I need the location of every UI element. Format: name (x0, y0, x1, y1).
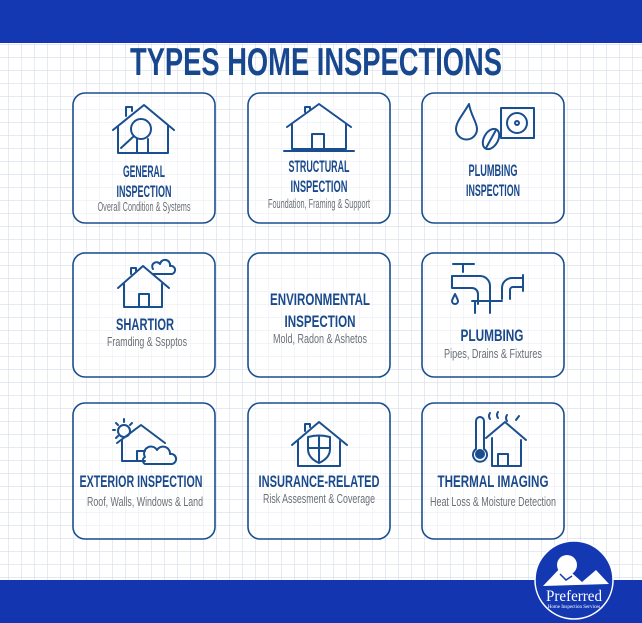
panel: plumbing inspection: INSPECTION (466, 181, 520, 200)
panel: plumbing (422, 253, 564, 377)
panel: general inspection: Overall Condition & Systems (98, 200, 190, 214)
bottom bar (0, 580, 642, 623)
icon: faucet and pipes (452, 264, 523, 313)
icon: house with cloud (118, 260, 175, 307)
panel: exterior inspection: EXTERIOR INSPECTION (80, 472, 202, 491)
icon: drop leaf fan (456, 104, 534, 152)
panel: thermal imaging: Heat Loss & Moisture Detection (430, 495, 556, 509)
panel: general inspection: GENERAL (123, 162, 165, 181)
logo: Home Inspection Services (548, 605, 600, 610)
panel: thermal imaging (422, 403, 564, 539)
panel: exterior inspection: Roof, Walls, Windows & Land (87, 495, 203, 509)
panel: environmental inspection: Mold, Radon & Ashetos (273, 332, 367, 346)
panel: thermal imaging: THERMAL IMAGING (438, 472, 548, 491)
logo (535, 541, 613, 619)
logo: Preferred (546, 588, 602, 605)
panel: general inspection (73, 93, 215, 223)
panel: structural inspection (248, 93, 390, 223)
panel: shartior: Framding & Sspptos (107, 335, 187, 349)
icon: thermometer and house (473, 412, 526, 466)
panel: insurance-related (248, 403, 390, 539)
panel: shartior: SHARTIOR (116, 315, 174, 334)
panel: plumbing: Pipes, Drains & Fixtures (444, 347, 542, 361)
panel: plumbing inspection (422, 93, 564, 223)
icon: house (284, 104, 354, 151)
panel: structural inspection: Foundation, Framing & Support (268, 197, 370, 211)
panel: insurance-related: INSURANCE-RELATED (258, 472, 380, 491)
panel: exterior inspection (73, 403, 215, 539)
panel: general inspection: INSPECTION (116, 182, 172, 201)
icon: house with magnifier (113, 105, 174, 153)
panel: structural inspection: STRUCTURAL (288, 157, 350, 176)
panel: shartior (73, 253, 215, 377)
panel: insurance-related: Risk Assesment & Coverage (263, 492, 375, 506)
icon: house with shield (292, 422, 347, 466)
panel: environmental inspection: ENVIRONMENTAL (270, 290, 370, 309)
top bar (0, 0, 642, 43)
panel: structural inspection: INSPECTION (290, 177, 348, 196)
panel: environmental inspection (248, 253, 390, 377)
panel: environmental inspection: INSPECTION (284, 312, 356, 331)
icon: house with sun and cloud (113, 419, 176, 464)
panel: plumbing inspection: PLUMBING (468, 161, 518, 180)
panel: plumbing: PLUMBING (460, 326, 524, 345)
